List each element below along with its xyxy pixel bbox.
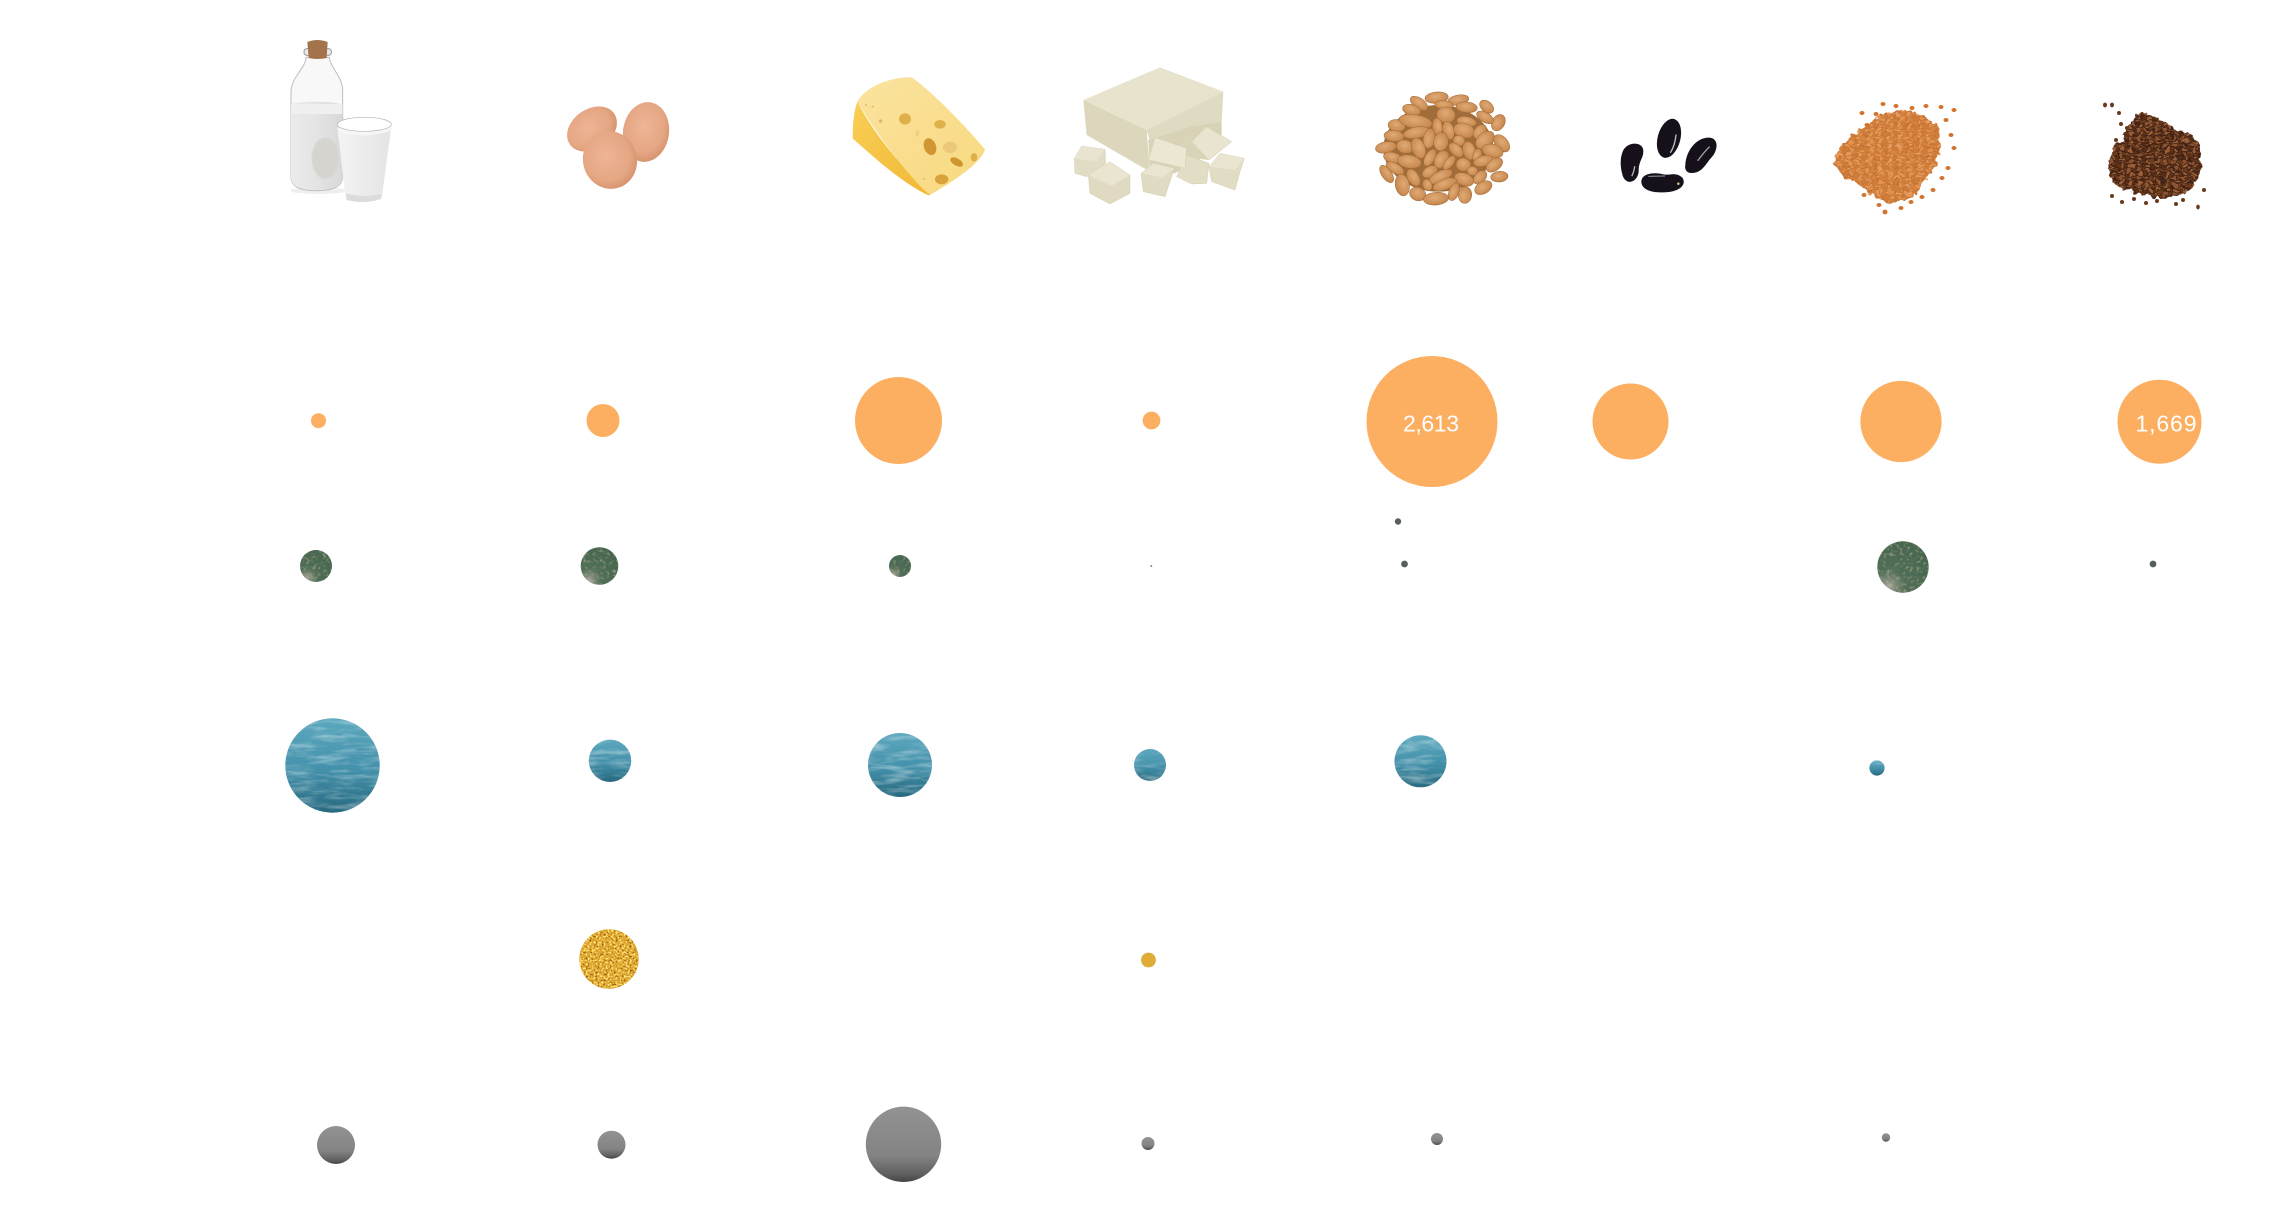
grain circle: eggs bbox=[579, 929, 639, 989]
row of food images bbox=[290, 40, 2206, 214]
land circle: milk bbox=[300, 550, 332, 582]
row: orange circles bbox=[311, 356, 2202, 487]
gray circle: eggs bbox=[598, 1131, 626, 1159]
grain circle: tofu bbox=[1141, 953, 1156, 967]
row: yellow grain circles bbox=[579, 929, 1156, 989]
orange circle: eggs bbox=[586, 404, 620, 437]
image: cheese wedge bbox=[853, 77, 985, 195]
image: red lentils bbox=[1834, 102, 1956, 214]
water circle: cheese bbox=[868, 733, 932, 797]
gray circle: lentils bbox=[1882, 1133, 1890, 1142]
orange circle: quinoa bbox=[2118, 380, 2202, 464]
image: tofu block and cubes bbox=[1074, 67, 1244, 204]
image: eggs bbox=[558, 97, 673, 195]
image: black beans bbox=[1621, 116, 1717, 192]
land circle: lentils bbox=[1877, 541, 1929, 593]
orange circle: lentils bbox=[1860, 381, 1942, 462]
row: water circles bbox=[285, 718, 1885, 813]
land dot: tofu bbox=[1150, 565, 1152, 567]
gray circle: almonds bbox=[1431, 1133, 1443, 1145]
land circle: eggs bbox=[581, 547, 618, 585]
image: milk bottle and glass bbox=[290, 40, 392, 202]
water circle: milk bbox=[285, 718, 380, 813]
row: land circles bbox=[300, 518, 2156, 593]
row: gray circles bbox=[317, 1107, 1890, 1182]
water circle: tofu bbox=[1134, 749, 1166, 781]
value label: almonds: 2,613 bbox=[1403, 410, 1459, 436]
water circle: eggs bbox=[589, 740, 631, 782]
orange circle: tofu bbox=[1143, 412, 1160, 429]
gray circle: tofu bbox=[1142, 1137, 1154, 1150]
value label: quinoa: 1,669 bbox=[2136, 410, 2196, 436]
gray circle: cheese bbox=[866, 1107, 941, 1182]
land dot: quinoa bbox=[2150, 561, 2156, 567]
water circle: lentils bbox=[1869, 760, 1885, 776]
orange circle: milk bbox=[311, 413, 326, 428]
water circle: almonds bbox=[1394, 735, 1446, 787]
land dot: almonds upper bbox=[1395, 518, 1401, 525]
land dot: almonds lower bbox=[1401, 561, 1408, 567]
gray circle: milk bbox=[317, 1126, 355, 1164]
orange circle: cheese bbox=[855, 377, 942, 464]
orange circle: almonds bbox=[1366, 356, 1498, 487]
image: almonds bbox=[1375, 91, 1513, 206]
orange circle: beans bbox=[1592, 384, 1668, 460]
image: quinoa bbox=[2103, 103, 2206, 209]
land circle: cheese bbox=[889, 555, 911, 577]
